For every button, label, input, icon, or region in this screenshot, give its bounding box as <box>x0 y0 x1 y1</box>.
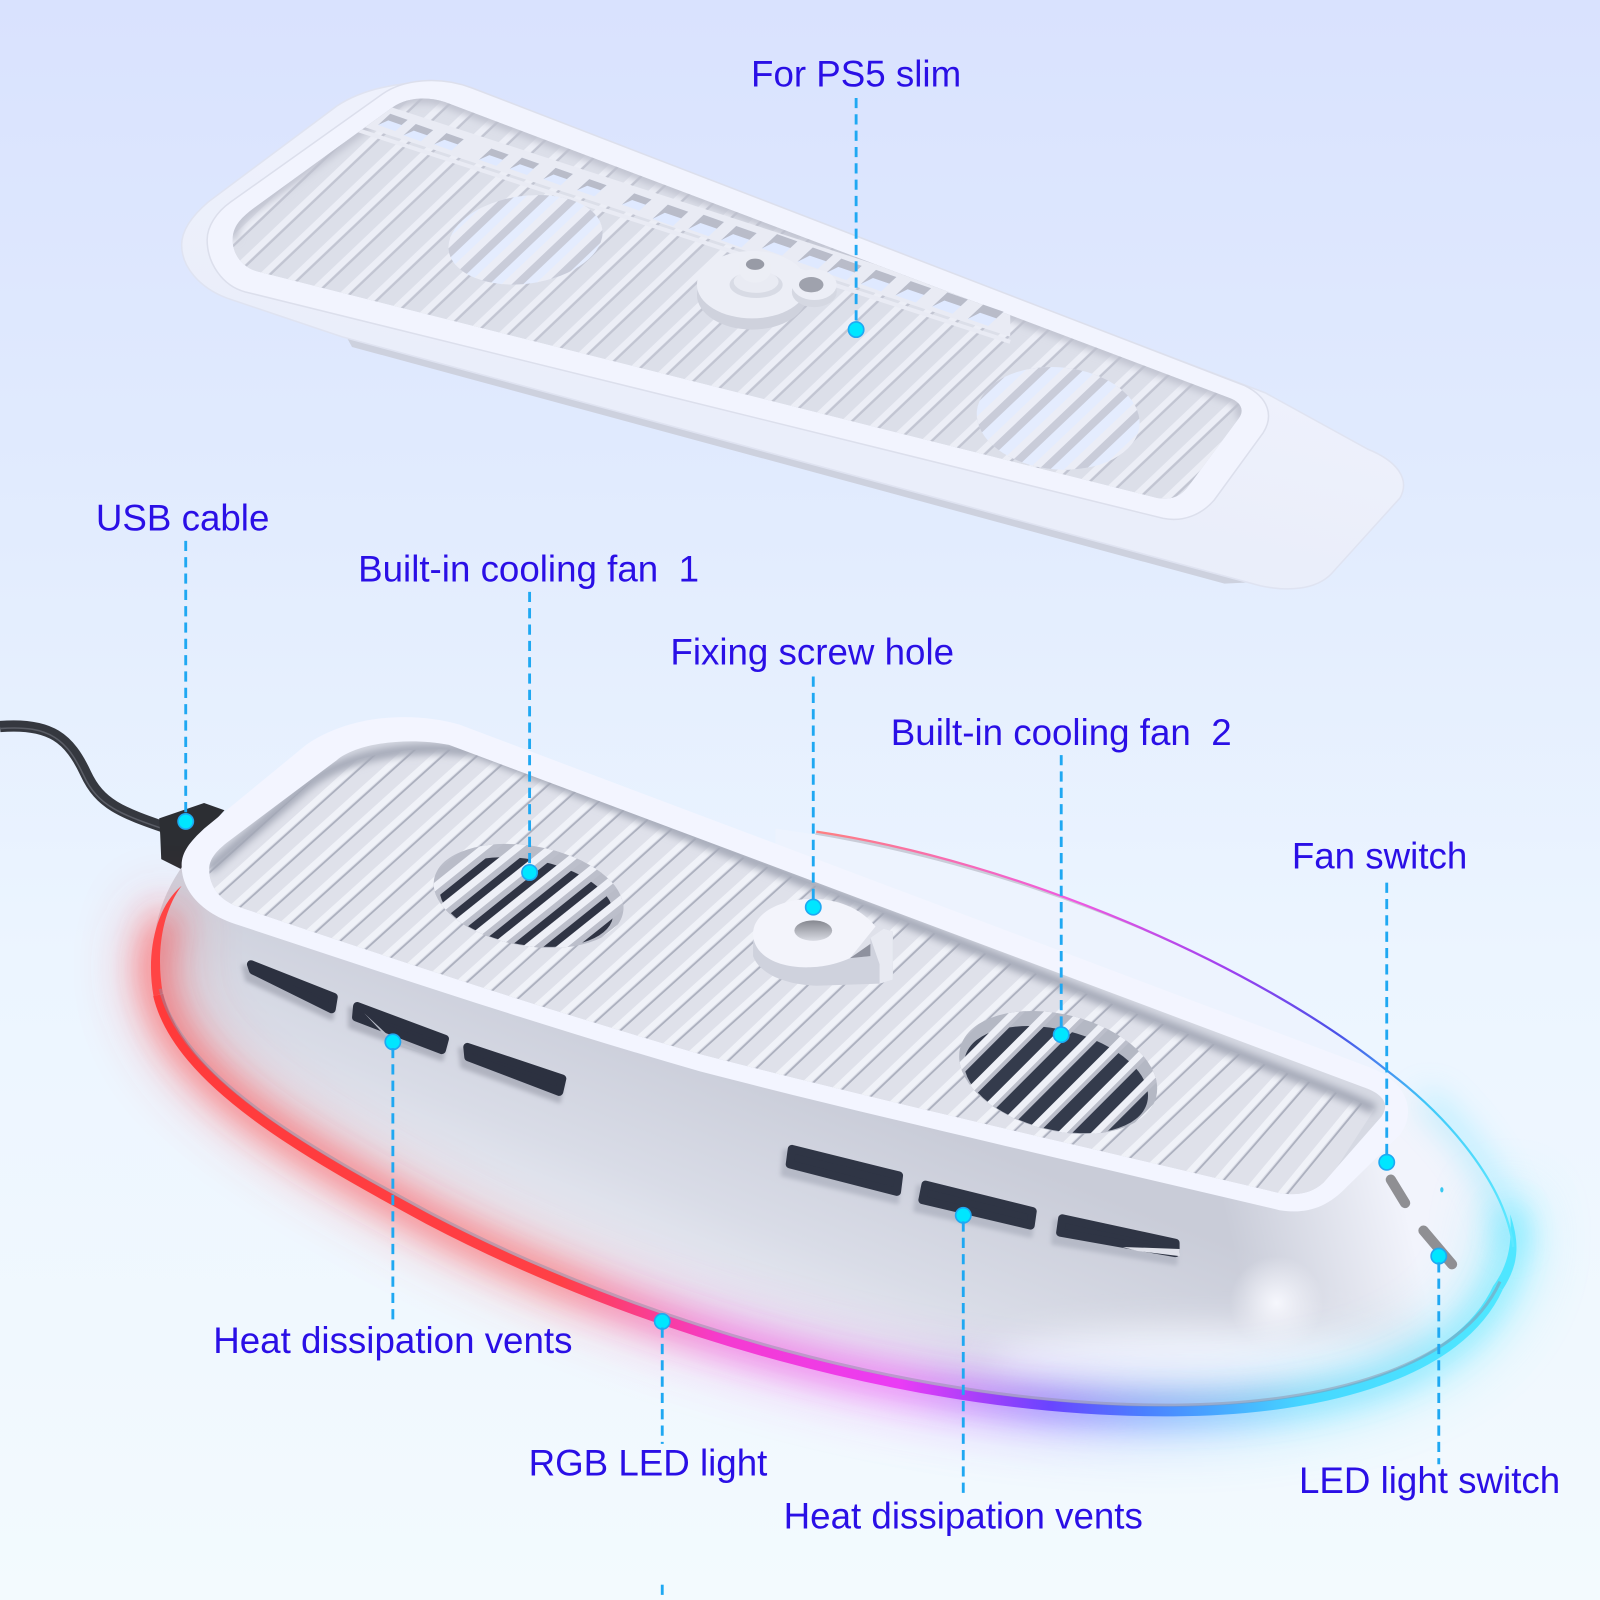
callout: Built-in cooling fan 2 <box>891 712 1232 1042</box>
callout: Heat dissipation vents right <box>784 1208 1143 1537</box>
plate fan cutout 2 <box>976 367 1140 470</box>
callout: Fixing screw hole <box>670 631 954 915</box>
callout: Built-in cooling fan 1: Built-in cooling fan 1 <box>358 549 699 590</box>
USB cable cord <box>0 726 168 831</box>
plate perforated hole row <box>378 114 1004 326</box>
thin upper LED arc <box>816 832 1513 1247</box>
callout: USB cable: USB cable <box>96 498 269 539</box>
callout: RGB LED light <box>529 1314 767 1484</box>
callout: Built-in cooling fan 2: Built-in cooling fan 2 <box>891 712 1232 753</box>
USB cable plug <box>159 803 224 869</box>
top cover plate: underside view <box>181 80 1404 590</box>
plate inner wall <box>233 99 1242 499</box>
callout: LED light switch: LED light switch <box>1299 1460 1560 1501</box>
RGB LED outer glow <box>153 908 1512 1411</box>
base body shell <box>153 832 1515 1411</box>
base slatted floor <box>209 742 1378 1194</box>
LED strip right taper <box>1493 1214 1516 1290</box>
plate underside shadow strip <box>342 329 1265 584</box>
plate outer flange <box>182 83 1404 589</box>
plate fan cutout 1 <box>448 195 602 284</box>
upper right cyan glow <box>1423 1097 1513 1247</box>
cooling stand base unit <box>0 594 1516 1411</box>
callout: Heat dissipation vents right: Heat dissipation vents <box>784 1496 1143 1537</box>
cooling fan opening 2 <box>959 1011 1158 1134</box>
RGB LED near glow <box>154 918 1512 1411</box>
translucent upper wedge behind the rim <box>776 829 1403 1097</box>
callout: USB cable <box>96 498 269 829</box>
callout: Built-in cooling fan 1 <box>358 549 699 880</box>
callout: For PS5 slim: For PS5 slim <box>751 54 961 95</box>
callout: Fan switch: Fan switch <box>1292 835 1467 876</box>
right vent group <box>783 1149 1180 1263</box>
lower right light area <box>990 1330 1418 1395</box>
plate grid band <box>347 93 1010 337</box>
callout: RGB LED light: RGB LED light <box>529 1443 767 1484</box>
callout: Heat dissipation vents left: Heat dissipation vents <box>213 1320 572 1361</box>
plate screw boss <box>697 251 837 330</box>
fixing screw boss <box>753 899 893 986</box>
base rim <box>182 717 1408 1211</box>
callout: LED light switch <box>1299 1248 1560 1501</box>
base inner wall <box>209 741 1385 1194</box>
fan switch button <box>1391 1180 1405 1203</box>
RGB LED strip <box>158 995 1498 1411</box>
LED inner edge line <box>160 989 1500 1405</box>
callout: For PS5 slim <box>751 54 961 337</box>
callout: Heat dissipation vents left <box>213 1034 572 1361</box>
callout: Fixing screw hole: Fixing screw hole <box>670 631 954 672</box>
plate raised rim <box>207 81 1268 519</box>
LED strip upper left taper <box>151 886 182 996</box>
LED switch button <box>1423 1231 1452 1264</box>
callout: Fan switch <box>1292 835 1467 1170</box>
white nose shading <box>1122 1070 1515 1411</box>
left vent group <box>244 964 562 1101</box>
cooling fan opening 1 <box>434 844 624 948</box>
indicator dot <box>1440 1187 1443 1192</box>
small round highlight <box>1230 1256 1323 1350</box>
stray dashed leader at bottom edge <box>661 1585 664 1600</box>
plate slatted floor <box>232 98 1242 498</box>
